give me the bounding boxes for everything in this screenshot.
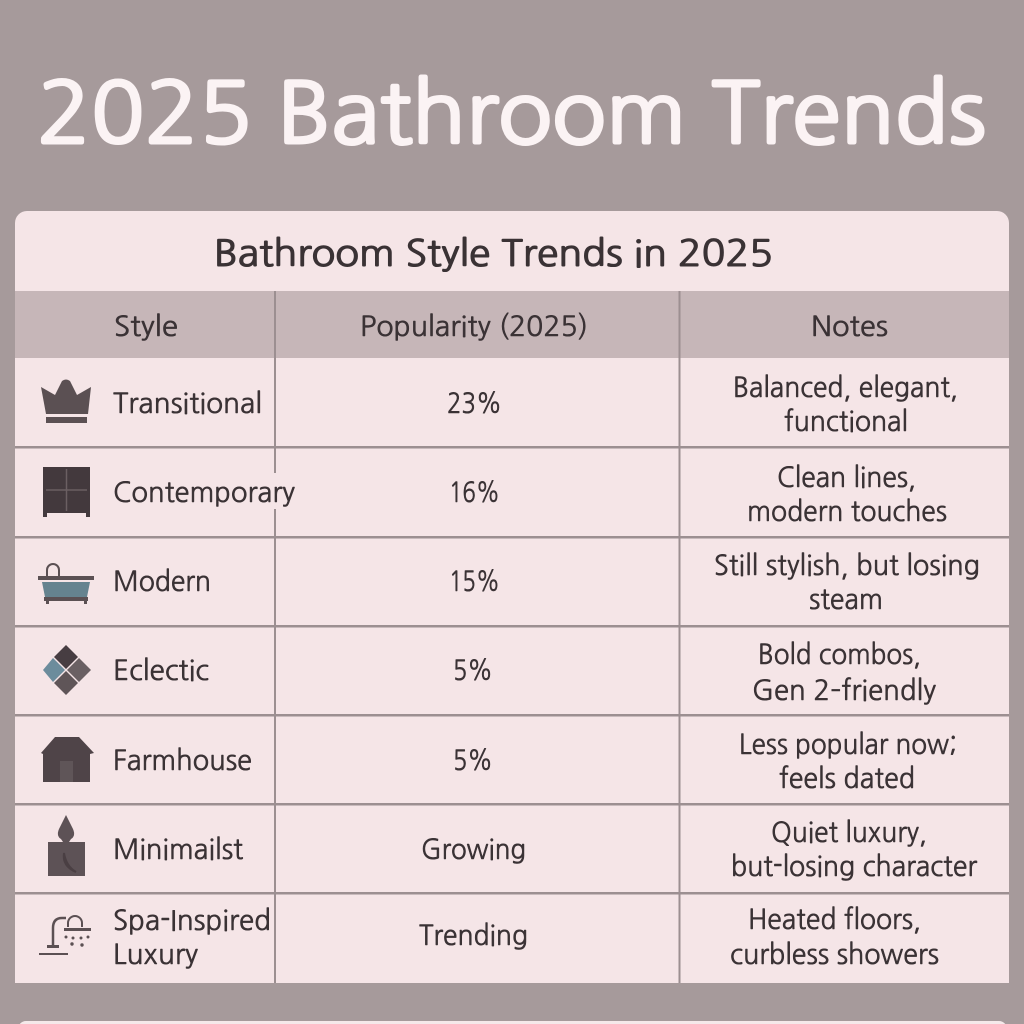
- row: Farmhouse: Farmhouse: [113, 747, 252, 775]
- row: Spa-Inspired Luxury: [39, 906, 939, 969]
- row: Minimalist: [48, 815, 978, 881]
- row: Minimalist: Quiet luxury,: [771, 819, 927, 847]
- row: Farmhouse: Less popular now;: [739, 731, 957, 759]
- title: 2025 Bathroom Trends: [37, 72, 986, 156]
- row: Farmhouse: [41, 731, 957, 793]
- row: Transitional: Balanced, elegant,: [733, 374, 958, 402]
- row: Eclectic: [43, 641, 936, 705]
- row: Spa-Inspired Luxury: Spa-Inspired: [113, 907, 271, 935]
- row: Minimalist: but-losing character: [731, 853, 978, 881]
- row: Modern: Still stylish, but losing: [714, 552, 980, 580]
- icon: shower: [39, 916, 91, 955]
- row: Contemporary: [43, 464, 947, 526]
- row: Eclectic: Gen 2–friendly: [752, 677, 936, 705]
- table header row: Style: [114, 313, 178, 341]
- row: Spa-Inspired Luxury: Luxury: [113, 941, 198, 969]
- row: Minimalist: Minimailst: [113, 836, 244, 864]
- row: Modern: steam: [809, 586, 883, 614]
- table header row: [15, 291, 1009, 358]
- row: Transitional: [41, 374, 958, 436]
- row: Modern: [38, 552, 980, 614]
- row: Farmhouse: 5%: [453, 747, 493, 775]
- icon: diamond tiles: [43, 645, 91, 695]
- row: Spa-Inspired Luxury: Heated floors,: [748, 906, 921, 934]
- table header row: Popularity (2025): [360, 312, 588, 341]
- row: Eclectic: 5%: [453, 657, 493, 685]
- row: Contemporary: modern touches: [747, 498, 947, 526]
- panel: bathroom style trends table: [15, 211, 1009, 983]
- icon: candle: [48, 815, 85, 876]
- row: Eclectic: Bold combos,: [758, 641, 921, 669]
- icon: crown: [41, 380, 91, 423]
- icon: bathtub: [38, 564, 94, 604]
- row: Minimalist: Growing: [421, 836, 526, 864]
- row: Transitional: functional: [784, 408, 908, 436]
- table heading: Bathroom Style Trends in 2025: [214, 236, 773, 272]
- row: Modern: 15%: [449, 568, 500, 596]
- bottom panel edge: [18, 1021, 1007, 1024]
- icon: cabinet: [43, 467, 90, 517]
- row: Contemporary: 16%: [449, 479, 500, 507]
- row: Spa-Inspired Luxury: Trending: [419, 922, 528, 950]
- row: Transitional: Transitional: [113, 390, 262, 418]
- row: Modern: Modern: [113, 568, 211, 596]
- row: Contemporary: Clean lines,: [777, 464, 916, 492]
- row: Transitional: 23%: [447, 390, 502, 418]
- table header row: Notes: [811, 313, 888, 341]
- row: Eclectic: Eclectic: [113, 657, 209, 685]
- row: Contemporary: Contemporary: [113, 479, 295, 507]
- row: Farmhouse: feels dated: [779, 765, 915, 793]
- row: Spa-Inspired Luxury: curbless showers: [730, 941, 939, 969]
- icon: house: [41, 737, 94, 782]
